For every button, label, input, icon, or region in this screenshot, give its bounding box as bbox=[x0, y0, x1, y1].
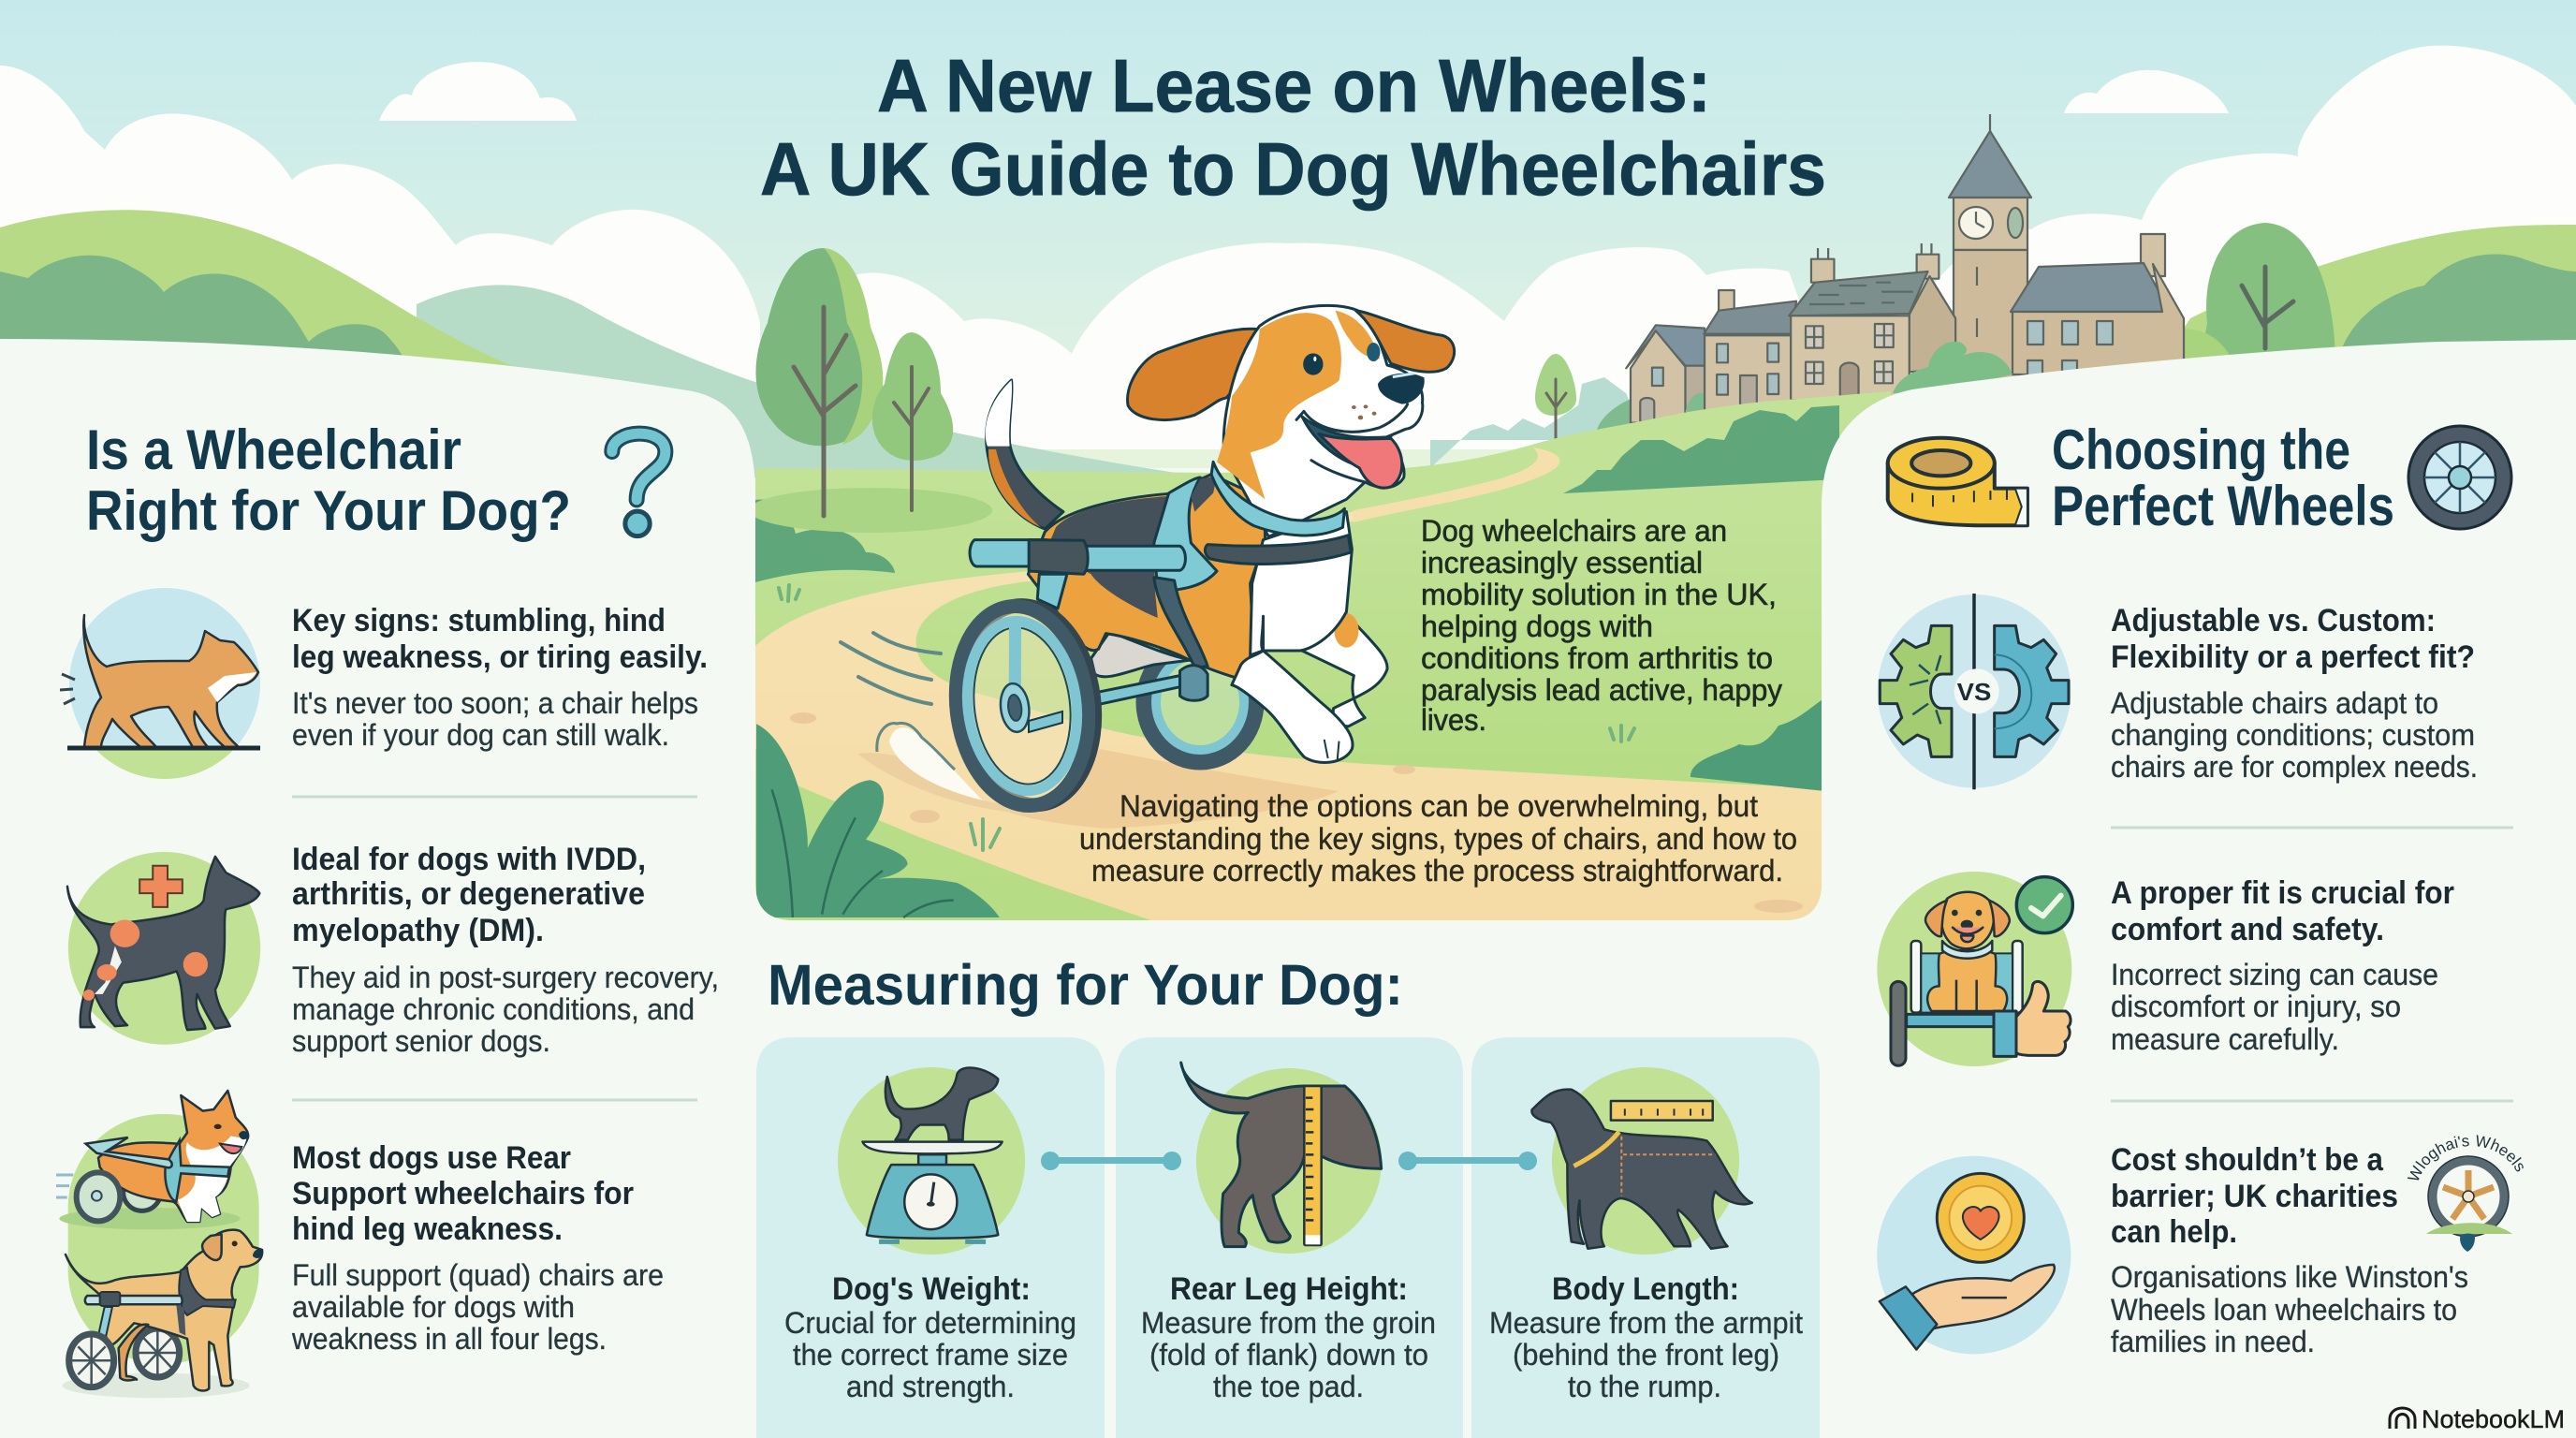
hero intro text: increasingly essential bbox=[1421, 546, 1703, 580]
road bbox=[755, 510, 1822, 927]
text: ideal for dogs: myelopathy (DM). bbox=[292, 913, 544, 948]
dark saddle bbox=[1046, 496, 1169, 618]
text: adjustable vs custom: changing conditions; custom bbox=[2111, 718, 2475, 752]
icon: dog with joints bbox=[67, 852, 260, 1045]
icon: adjustable vs custom bbox=[1878, 594, 2071, 789]
text: adjustable vs custom: Flexibility or a perfect fit? bbox=[2111, 639, 2475, 675]
tongue bbox=[1319, 433, 1402, 488]
text: proper fit: measure carefully. bbox=[2111, 1022, 2339, 1056]
head orange patch bbox=[1217, 313, 1341, 499]
icon: hand with heart coin bbox=[1877, 1156, 2071, 1354]
text: ideal for dogs: manage chronic conditions, and bbox=[292, 992, 695, 1026]
hero navigating text: Navigating the options can be overwhelming, but bbox=[1120, 789, 1758, 823]
buildings: left, second and hall bbox=[1597, 243, 1955, 431]
chest strap bbox=[1205, 536, 1351, 564]
right panel bbox=[1822, 340, 2576, 1438]
text: ideal for dogs: support senior dogs. bbox=[292, 1024, 550, 1058]
labrador bbox=[66, 1230, 262, 1390]
text: key signs bbox=[292, 603, 708, 752]
sky background bbox=[0, 0, 2576, 487]
text: cost barrier: can help. bbox=[2111, 1214, 2237, 1250]
hero navigating text: measure correctly makes the process straightforward. bbox=[1091, 854, 1783, 888]
tower bbox=[1949, 114, 2031, 381]
text: adjustable vs custom: chairs are for complex needs. bbox=[2111, 750, 2478, 784]
text: body length: Body Length: bbox=[1552, 1271, 1739, 1307]
main dog in wheelchair bbox=[944, 305, 1455, 814]
text: cost barrier: Wheels loan wheelchairs to bbox=[2111, 1293, 2457, 1327]
text: rear leg height: Measure from the groin bbox=[1141, 1306, 1436, 1340]
text: ideal for dogs bbox=[292, 842, 719, 1058]
building: right wing bbox=[2011, 234, 2184, 379]
icon: measuring tape bbox=[1888, 438, 2027, 525]
icon: rear leg with ruler bbox=[1181, 1063, 1382, 1247]
icon: rear support and quad wheelchairs bbox=[56, 1091, 262, 1398]
text: dog's weight: Dog's Weight: bbox=[832, 1271, 1031, 1307]
icon: proper fit bbox=[1877, 872, 2072, 1066]
foreground leaves left bbox=[756, 724, 1000, 917]
connector: weight to rear bbox=[1041, 1152, 1181, 1170]
smile lines bbox=[1296, 404, 1408, 482]
text: body length: (behind the front leg) bbox=[1513, 1338, 1779, 1372]
text: key signs: leg weakness, or tiring easily. bbox=[292, 639, 708, 675]
paw toes bbox=[1325, 740, 1339, 761]
text: ideal for dogs: arthritis, or degenerative bbox=[292, 876, 645, 912]
frame clamp bbox=[1029, 540, 1088, 574]
hero intro text: conditions from arthritis to bbox=[1421, 641, 1773, 675]
text: adjustable vs custom bbox=[2111, 603, 2478, 784]
road pebbles bbox=[790, 712, 1803, 913]
text: most dogs use rear: Most dogs use Rear bbox=[292, 1140, 571, 1176]
logo: NotebookLM: NotebookLM bbox=[2422, 1405, 2565, 1433]
far path bbox=[1354, 448, 1559, 522]
heading: is a wheelchair right: Right for Your Dog? bbox=[86, 479, 571, 542]
text: key signs: Key signs: stumbling, hind bbox=[292, 603, 666, 638]
hero scene bbox=[755, 429, 1822, 920]
dust cloud bbox=[877, 723, 983, 800]
connector: rear to body bbox=[1398, 1152, 1537, 1170]
text: proper fit: comfort and safety. bbox=[2111, 912, 2384, 947]
text: proper fit: Incorrect sizing can cause bbox=[2111, 958, 2438, 991]
frame bar bbox=[970, 540, 1046, 566]
raised far leg bbox=[1302, 611, 1387, 726]
text: dog's weight: and strength. bbox=[846, 1370, 1015, 1403]
panel base bbox=[0, 468, 2576, 1438]
tree 1 bbox=[756, 248, 883, 516]
left ear bbox=[1128, 329, 1260, 420]
text: rear leg height: Rear Leg Height: bbox=[1170, 1271, 1408, 1307]
text: most dogs use rear: Support wheelchairs for bbox=[292, 1176, 634, 1211]
inner green patch bbox=[915, 521, 1822, 786]
text: cost barrier: Organisations like Winston's bbox=[2111, 1260, 2468, 1294]
heading: measuring for your dog: Measuring for Your Dog: bbox=[768, 953, 1403, 1017]
text: cost barrier: barrier; UK charities bbox=[2111, 1179, 2398, 1214]
shrubs by tower bbox=[1893, 342, 2012, 393]
front wheel bbox=[944, 597, 1105, 814]
icon: walking dog bbox=[60, 588, 260, 779]
icon: dog on scale bbox=[862, 1068, 1003, 1244]
right ear bbox=[1355, 311, 1455, 372]
text: body length: Measure from the armpit bbox=[1489, 1306, 1803, 1340]
eyes bbox=[1303, 343, 1380, 375]
hero navigating text bbox=[1079, 789, 1797, 888]
icon: question mark bbox=[612, 433, 666, 536]
text: most dogs use rear: Full support (quad) chairs are bbox=[292, 1258, 664, 1292]
icon: wheel bbox=[2408, 426, 2511, 529]
body orange bbox=[1028, 475, 1265, 679]
motion lines bbox=[841, 633, 941, 704]
head bbox=[1223, 305, 1423, 536]
text: most dogs use rear: available for dogs with bbox=[292, 1290, 575, 1324]
left bush bbox=[755, 499, 895, 582]
icon: dog with length ruler bbox=[1531, 1090, 1752, 1249]
front axle stub bbox=[1029, 712, 1062, 732]
text: rear leg height: the toe pad. bbox=[1213, 1370, 1364, 1403]
hill: left light green bbox=[0, 210, 534, 374]
road shadow bbox=[992, 749, 1339, 829]
back of neck dark bbox=[1191, 476, 1217, 512]
collar bbox=[1211, 462, 1344, 536]
chest bbox=[1251, 512, 1352, 655]
text: adjustable vs custom: Adjustable chairs adapt to bbox=[2111, 686, 2438, 720]
text: dog's weight bbox=[784, 1271, 1076, 1403]
eye patch bbox=[1336, 311, 1380, 359]
text: rear leg height bbox=[1141, 1271, 1436, 1403]
side harness bbox=[1154, 477, 1217, 592]
hero intro text bbox=[1421, 514, 1782, 737]
hill: distant teal bbox=[417, 285, 1208, 477]
mouth bbox=[1302, 417, 1391, 466]
frame upright bbox=[1037, 574, 1067, 609]
text: rear leg height: (fold of flank) down to bbox=[1149, 1338, 1428, 1372]
heading: choosing the perfect wheels: Perfect Wheels bbox=[2052, 475, 2394, 537]
text: proper fit: discomfort or injury, so bbox=[2111, 990, 2401, 1023]
clouds: left bbox=[0, 62, 760, 403]
icon: adjustable vs custom: VS bbox=[1957, 678, 1991, 706]
title bbox=[760, 44, 1826, 211]
card: rear leg height bbox=[1116, 1037, 1463, 1438]
teal bushes behind village bbox=[1430, 377, 1647, 468]
text: body length: to the rump. bbox=[1568, 1370, 1721, 1403]
text: body length bbox=[1489, 1271, 1803, 1403]
hero intro text: lives. bbox=[1421, 703, 1486, 737]
muzzle whiskers bbox=[1352, 404, 1376, 419]
heading: choosing the perfect wheels: Choosing the bbox=[2052, 418, 2350, 481]
hero intro text: Dog wheelchairs are an bbox=[1421, 514, 1727, 548]
clouds: centre and right bbox=[854, 46, 2576, 449]
hill in front of village bbox=[1354, 391, 1891, 524]
text: ideal for dogs: Ideal for dogs with IVDD, bbox=[292, 842, 646, 877]
heading: choosing the perfect wheels bbox=[2052, 418, 2394, 537]
left panel bbox=[0, 339, 755, 1438]
belly strap bbox=[1154, 578, 1208, 668]
ground bbox=[755, 429, 1822, 920]
dust shadow bbox=[857, 753, 1007, 812]
text: adjustable vs custom: Adjustable vs. Custom: bbox=[2111, 603, 2436, 638]
corgi bbox=[77, 1091, 248, 1222]
hero intro text: helping dogs with bbox=[1421, 609, 1653, 643]
hero intro text: paralysis lead active, happy bbox=[1421, 673, 1782, 707]
text: key signs: It's never too soon; a chair helps bbox=[292, 686, 698, 720]
title: A UK Guide to Dog Wheelchairs bbox=[760, 127, 1826, 211]
text: cost barrier: Cost shouldn’t be a bbox=[2111, 1142, 2384, 1178]
tail bbox=[986, 380, 1063, 529]
text: most dogs use rear: weakness in all four legs. bbox=[291, 1322, 607, 1356]
back wheel bbox=[1144, 642, 1256, 762]
hero intro text: mobility solution in the UK, bbox=[1421, 578, 1777, 611]
heading: is a wheelchair right: Is a Wheelchair bbox=[86, 418, 461, 481]
nose bbox=[1378, 374, 1425, 404]
text: proper fit bbox=[2111, 875, 2454, 1056]
text: most dogs use rear bbox=[291, 1140, 664, 1356]
text: cost barrier: families in need. bbox=[2111, 1325, 2315, 1358]
small tree bbox=[1535, 354, 1576, 440]
card: dog's weight bbox=[756, 1037, 1105, 1438]
logo: charity wheel: Wloghai's Wheels bbox=[2408, 1135, 2524, 1180]
text: dog's weight: the correct frame size bbox=[793, 1338, 1068, 1372]
heading: is a wheelchair right bbox=[86, 418, 571, 542]
foreground bush right bbox=[1690, 697, 1825, 791]
rear axle bbox=[1095, 676, 1181, 705]
village bbox=[1597, 114, 2184, 431]
hero navigating text: understanding the key signs, types of chairs, and how to bbox=[1079, 822, 1797, 856]
card: body length bbox=[1471, 1037, 1820, 1438]
text: key signs: even if your dog can still walk. bbox=[292, 718, 669, 752]
text: most dogs use rear: hind leg weakness. bbox=[292, 1211, 563, 1247]
text: proper fit: A proper fit is crucial for bbox=[2111, 875, 2454, 911]
near front leg bbox=[1232, 616, 1353, 762]
far rear leg bbox=[1091, 632, 1191, 677]
text: cost barrier bbox=[2111, 1142, 2468, 1358]
dark bushes on hill bbox=[1563, 405, 1839, 493]
logo: charity wheel bbox=[2408, 1135, 2524, 1252]
title: A New Lease on Wheels: bbox=[877, 44, 1711, 127]
hills: right bbox=[2144, 223, 2576, 374]
text: dog's weight: Crucial for determining bbox=[784, 1306, 1076, 1340]
tree 2 bbox=[872, 332, 953, 510]
darker grass patch bbox=[749, 488, 992, 533]
text: ideal for dogs: They aid in post-surgery recovery, bbox=[292, 961, 719, 994]
grass tufts bbox=[779, 585, 1634, 850]
hill: left dark green bbox=[0, 256, 404, 360]
